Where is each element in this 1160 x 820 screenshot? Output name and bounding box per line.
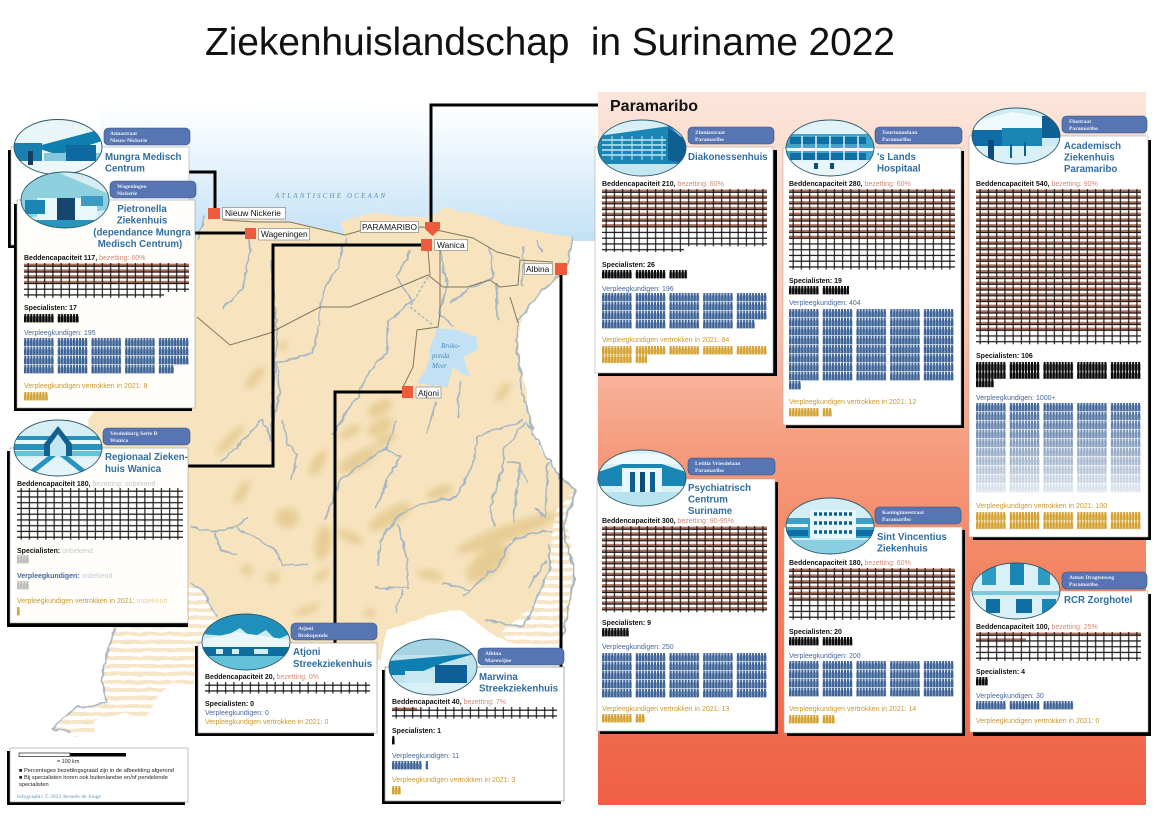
marker: Nieuw Nickerie: Nieuw Nickerie xyxy=(225,208,281,218)
name xyxy=(105,152,182,174)
name xyxy=(877,532,947,554)
specialists label: Specialisten: 1 xyxy=(392,728,441,735)
beds label: Beddencapaciteit 180, bezetting: 60% xyxy=(789,560,911,567)
name: Ziekenhuis xyxy=(877,544,928,554)
rivers xyxy=(52,217,576,730)
nurses label: Verpleegkundigen: 11 xyxy=(392,753,459,760)
specialists icons xyxy=(602,628,629,636)
name: Atjoni xyxy=(293,647,320,658)
marker: Nieuw Nickerie xyxy=(208,208,286,219)
bed grid xyxy=(602,189,767,252)
name: Academisch xyxy=(1064,141,1121,152)
photo xyxy=(21,172,109,228)
departed nurses icons xyxy=(789,408,832,417)
card xyxy=(7,448,188,627)
specialists label: Specialisten: 26 xyxy=(602,262,655,269)
departed nurses label: Verpleegkundigen vertrokken in 2021: 0 xyxy=(205,719,328,726)
marker: Atjoni: Atjoni xyxy=(418,388,439,398)
address: Annastraat xyxy=(110,131,137,137)
departed nurses icons xyxy=(602,346,767,363)
nurses icons xyxy=(975,403,1142,495)
name: Paramaribo xyxy=(1064,164,1117,175)
nurses label: Verpleegkundigen: 195 xyxy=(24,330,96,337)
specialists label: Specialisten: onbekend xyxy=(17,548,93,555)
nurses label: Verpleegkundigen: 1000+ xyxy=(976,395,1056,402)
name: RCR Zorghotel xyxy=(1064,595,1132,606)
photo xyxy=(786,120,874,176)
departed nurses label: Verpleegkundigen vertrokken in 2021: 14 xyxy=(789,706,916,713)
photo xyxy=(389,639,477,695)
nurses label: Verpleegkundigen: onbekend xyxy=(17,573,112,580)
marker: Paramaribo xyxy=(360,222,440,236)
card xyxy=(597,479,778,734)
address xyxy=(688,458,775,475)
address: Wanica xyxy=(110,438,128,444)
address: Verdenburg Serie B xyxy=(110,431,158,437)
panel: Pietronella Ziekenhuis xyxy=(14,172,196,411)
panel: 's Lands Hospitaal xyxy=(783,120,964,428)
specialists label: Specialisten: 0 xyxy=(205,701,254,708)
photo xyxy=(598,120,686,176)
specialists label: Specialisten: 17 xyxy=(24,305,77,312)
marker: Atjoni xyxy=(402,386,441,398)
lake label: ponda xyxy=(431,352,450,360)
marker: Paramaribo: PARAMARIBO xyxy=(362,222,417,232)
specialists label: Specialisten: 20 xyxy=(789,629,842,636)
legend box xyxy=(7,748,188,805)
card xyxy=(970,591,1151,736)
address xyxy=(1062,116,1147,133)
photo xyxy=(786,498,874,554)
name: Psychiatrisch xyxy=(688,483,751,494)
specialists icons xyxy=(976,362,1141,387)
specialists icons xyxy=(602,270,687,278)
relief xyxy=(212,341,561,619)
address xyxy=(291,623,377,640)
specialists icons xyxy=(789,286,849,294)
lake label: Broko- xyxy=(441,342,461,350)
ocean xyxy=(100,100,597,241)
name: Mungra Medisch xyxy=(105,152,182,163)
departed nurses label: Verpleegkundigen vertrokken in 2021: 13 xyxy=(602,706,729,713)
address xyxy=(110,181,196,198)
address: Paramaribo xyxy=(1069,126,1098,132)
departed nurses label: Verpleegkundigen vertrokken in 2021: 8 xyxy=(24,383,147,390)
address: Paramaribo xyxy=(695,137,724,143)
address: Paramaribo xyxy=(695,468,724,474)
address: Koninginnestraat xyxy=(882,510,924,516)
address: Albina xyxy=(485,651,501,657)
disputed area south-east xyxy=(500,490,575,647)
name: Centrum xyxy=(105,164,145,174)
panel: RCR Zorghotel xyxy=(970,563,1151,736)
panel: Diakonessenhuis xyxy=(595,120,777,376)
credit: Infographic © 2022 Jeroeën de Jonge xyxy=(17,793,101,800)
name: Suriname xyxy=(688,506,733,517)
bed grid xyxy=(789,189,955,270)
card xyxy=(8,147,189,248)
departed nurses icons xyxy=(17,607,20,616)
panel: Academisch Ziekenhuis Paramaribo xyxy=(969,108,1151,540)
name: Regionaal Zieken- xyxy=(105,452,188,463)
name xyxy=(93,204,191,250)
nurses icons xyxy=(602,653,767,698)
address: Letitia Vriesdelaan xyxy=(695,461,741,467)
address xyxy=(103,428,190,445)
address xyxy=(875,127,962,144)
name: Centrum xyxy=(688,494,728,506)
name xyxy=(479,672,558,694)
nurses label: Verpleegkundigen: 30 xyxy=(976,693,1044,700)
address: Anton Dragtenweg xyxy=(1069,575,1114,581)
bed grid xyxy=(205,682,370,694)
name xyxy=(688,483,751,517)
name xyxy=(1064,141,1121,175)
departed nurses label: Verpleegkundigen vertrokken in 2021: 0 xyxy=(976,718,1099,725)
bed grid xyxy=(976,189,1141,344)
photo xyxy=(598,450,686,506)
photo xyxy=(14,119,104,175)
nurses label: Verpleegkundigen: 250 xyxy=(602,644,674,651)
address: Brokopondo xyxy=(298,633,328,639)
nurses label: Verpleegkundigen: 0 xyxy=(205,710,269,717)
specialists icons xyxy=(24,314,79,322)
name xyxy=(877,152,921,174)
name: Medisch Centrum) xyxy=(98,239,182,250)
nurses label: Verpleegkundigen: 196 xyxy=(602,286,674,293)
bed grid xyxy=(602,526,767,612)
specialists label: Specialisten: 9 xyxy=(602,620,651,627)
departed nurses label: Verpleegkundigen vertrokken in 2021: 100 xyxy=(976,503,1107,510)
address: Zinniastraat xyxy=(695,130,725,136)
address xyxy=(104,128,190,145)
connector lines xyxy=(188,105,598,668)
marker: Wageningen xyxy=(245,228,310,240)
beds label: Beddencapaciteit 210, bezetting: 60% xyxy=(602,181,724,188)
scale bar xyxy=(19,753,126,765)
name: Streekziekenhuis xyxy=(293,659,372,670)
bed grid xyxy=(392,707,557,718)
legend notes: ■ Percentages bezettingsgraad zijn in de afbeelding afgerond xyxy=(19,768,174,774)
title: Ziekenhuislandschap in Suriname 2022 xyxy=(205,21,895,64)
departed nurses icons xyxy=(602,714,645,723)
marker: Wanica: Wanica xyxy=(437,240,465,250)
specialists icons xyxy=(392,736,395,744)
marker: Wageningen: Wageningen xyxy=(261,229,308,239)
panel: Regionaal Ziekenhuis Wanica xyxy=(7,420,190,627)
address: Marowijne xyxy=(485,658,512,664)
beds label: Beddencapaciteit 280, bezetting: 60% xyxy=(789,181,911,188)
departed nurses icons xyxy=(789,715,835,724)
legend notes xyxy=(19,768,174,788)
card xyxy=(595,147,777,376)
card xyxy=(195,643,377,736)
card xyxy=(783,148,964,428)
name: 's Lands xyxy=(877,152,916,163)
scale bar: = 100 km xyxy=(57,759,80,765)
address: Paramaribo xyxy=(882,137,911,143)
panel: Marwina Streekziekenhuis xyxy=(382,639,564,804)
legend xyxy=(7,748,188,805)
name xyxy=(105,452,188,475)
departed nurses label: Verpleegkundigen vertrokken in 2021: 84 xyxy=(602,337,729,344)
panel: Psychiatrisch Centrum Suriname xyxy=(597,450,778,734)
nurses label: Verpleegkundigen: 404 xyxy=(789,300,861,307)
name: Ziekenhuis xyxy=(1064,152,1115,164)
photo xyxy=(972,563,1060,619)
ocean label: ATLANTISCHE OCEAAN xyxy=(274,192,385,200)
panel: Mungra Medisch Centrum xyxy=(8,119,190,248)
beds label: Beddencapaciteit 180, bezetting: onbekend xyxy=(17,481,156,488)
marker: Albina: Albina xyxy=(526,264,550,274)
address: Paramaribo xyxy=(1069,582,1098,588)
nurses icons xyxy=(602,293,767,329)
departed nurses icons xyxy=(976,512,1141,529)
specialists label: Specialisten: 4 xyxy=(976,669,1025,676)
name: huis Wanica xyxy=(105,464,162,475)
disputed area south-west xyxy=(52,583,225,737)
beds label: Beddencapaciteit 540, bezetting: 90% xyxy=(976,181,1098,188)
specialists label: Specialisten: 19 xyxy=(789,278,842,285)
name: Sint Vincentius xyxy=(877,532,947,543)
beds label: Beddencapaciteit 100, bezetting: 25% xyxy=(976,624,1098,631)
heading: Paramaribo: Paramaribo xyxy=(610,98,698,115)
beds label: Beddencapaciteit 40, bezetting: 7% xyxy=(392,699,506,706)
nurses label: Verpleegkundigen: 200 xyxy=(789,653,861,660)
address: Wageningen xyxy=(117,184,147,190)
legend notes: specialisten xyxy=(19,782,49,788)
bed grid xyxy=(24,263,189,298)
departed nurses label: Verpleegkundigen vertrokken in 2021: 12 xyxy=(789,399,916,406)
name: Pietronella xyxy=(117,204,167,215)
nurses icons xyxy=(976,701,1074,710)
name xyxy=(293,647,372,670)
lake: Brokopondo xyxy=(417,328,477,387)
specialists icons xyxy=(789,637,853,645)
beds label: Beddencapaciteit 300, bezetting: 90-95% xyxy=(602,518,734,525)
lake label: Meer xyxy=(431,362,447,370)
card xyxy=(784,527,965,736)
address: Nieuw-Nickerie xyxy=(110,138,148,144)
marker: Albina xyxy=(524,263,567,275)
bed grid xyxy=(976,632,1141,661)
address: Flustraat xyxy=(1069,119,1091,125)
nurses icons xyxy=(392,761,428,770)
address xyxy=(875,507,961,524)
legend notes: ■ Bij specialisten horen ook buitenlandse en/of pendelende xyxy=(19,775,168,781)
card xyxy=(382,667,564,804)
name: Streekziekenhuis xyxy=(479,684,558,694)
departed nurses label: Verpleegkundigen vertrokken in 2021: 3 xyxy=(392,777,515,784)
name: (dependance Mungra xyxy=(93,228,191,238)
address xyxy=(478,648,564,665)
name: Ziekenhuis xyxy=(117,216,167,226)
departed nurses icons xyxy=(392,786,401,795)
nurses icons xyxy=(24,338,189,374)
address: Paramaribo xyxy=(882,517,911,523)
photo xyxy=(14,420,102,476)
land xyxy=(52,208,575,737)
departed nurses icons xyxy=(24,392,48,401)
beds label: Beddencapaciteit 117, bezetting: 60% xyxy=(24,255,145,262)
photo xyxy=(202,614,290,670)
address: Tourtonnelaan xyxy=(882,130,918,136)
address: Atjoni xyxy=(298,626,314,632)
nurses icons xyxy=(789,309,955,390)
panel: Atjoni Streekziekenhuis xyxy=(195,614,377,736)
card xyxy=(14,200,195,411)
photo xyxy=(972,108,1060,164)
specialists icons xyxy=(976,677,988,685)
address xyxy=(688,127,774,144)
bed grid xyxy=(789,568,955,620)
marker: Wanica xyxy=(421,239,468,251)
address xyxy=(1062,572,1147,589)
bed grid xyxy=(17,488,183,540)
panel: Paramaribo background xyxy=(598,92,1146,805)
departed nurses label: Verpleegkundigen vertrokken in 2021: onbekend xyxy=(17,598,167,605)
roads xyxy=(197,220,553,387)
name: Hospitaal xyxy=(877,164,921,174)
lake label xyxy=(431,342,461,370)
card xyxy=(969,136,1151,540)
beds label: Beddencapaciteit 20, bezetting: 0% xyxy=(205,674,319,681)
specialists icons xyxy=(17,555,29,564)
panel: Sint Vincentius Ziekenhuis xyxy=(784,498,965,736)
name: Diakonessenhuis xyxy=(688,152,768,163)
address: Nickerie xyxy=(117,191,138,197)
nurses icons xyxy=(789,661,955,697)
name: Marwina xyxy=(479,672,518,683)
specialists label: Specialisten: 106 xyxy=(976,353,1033,360)
map: Suriname xyxy=(52,100,597,737)
nurses icons xyxy=(17,581,29,590)
